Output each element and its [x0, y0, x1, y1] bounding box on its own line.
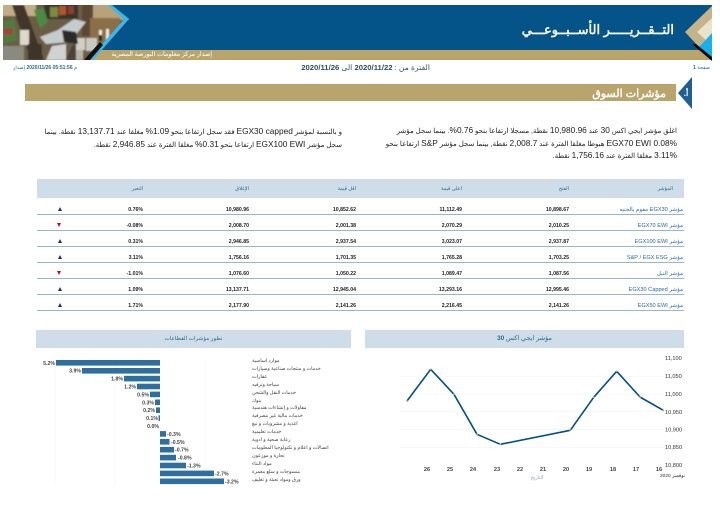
- bar chart: sectors: 1.8%: [111, 377, 123, 383]
- section heading bar: [25, 77, 692, 109]
- indices table: 1,756.16: [229, 255, 249, 261]
- indices table: 1.71%: [128, 303, 143, 309]
- indices table: 2,946.85: [229, 239, 249, 245]
- bar chart: sectors: 3.9%: [69, 369, 81, 375]
- indices table: -1.01%: [127, 271, 143, 277]
- chevron: cyan and black accents: [84, 5, 129, 60]
- sector labels: خدمات مالية غير مصرفية: [252, 414, 303, 419]
- bar chart: sectors: [43, 360, 239, 485]
- bar chart: sectors: 0.0%: [147, 424, 159, 430]
- issue date: م 05:51:56 2020/11/26 إصدار: [13, 65, 77, 71]
- indices table: 0.31%: [128, 239, 143, 245]
- sector labels: سياحة وترفيه: [252, 383, 279, 388]
- sector labels: خدمات النقل والشحن: [252, 391, 296, 396]
- indices table: 0.76%: [128, 207, 143, 213]
- paragraph left: سجل مؤشر EGX100 EWI ارتفاعا بنحو 0.31% مغلقا الفترة عند 2,946.85 نقطة.: [94, 139, 342, 149]
- bar chart: sectors: -0.7%: [175, 448, 189, 454]
- bar chart: sectors: -2.7%: [215, 471, 229, 477]
- y axis labels: [665, 356, 682, 469]
- indices table: 12,995.46: [546, 287, 569, 293]
- x axis labels: 18: [610, 467, 616, 473]
- indices table: 2,141.26: [549, 303, 569, 309]
- indices table: 1.09%: [128, 287, 143, 293]
- indices table: 2,010.25: [549, 223, 569, 229]
- indices table: 10,898.67: [546, 207, 569, 213]
- banner background: [92, 5, 712, 60]
- indices table: -0.08%: [127, 223, 143, 229]
- paragraph left: و بالنسبة لمؤشر EGX30 capped فقد سجل ارتفاعا بنحو 1.09% مغلقا عند 13,137.71 نقطة. بينما: [45, 126, 342, 136]
- indices table: 11,112.49: [439, 207, 462, 213]
- x axis labels: 20: [563, 467, 569, 473]
- panel: EGX30 chart header: مؤشر ايجي اكس 30: [497, 335, 552, 342]
- bar chart: sectors: -0.3%: [167, 432, 181, 438]
- sector labels: رعاية صحية و ادوية: [252, 438, 290, 443]
- y axis labels: 10,850: [665, 445, 682, 451]
- paragraph left: [45, 126, 342, 149]
- paragraph right: 3.11% مغلقا الفترة عند 1,756.16 نقطة.: [553, 150, 677, 160]
- indices table: 2,937.87: [549, 239, 569, 245]
- sector labels: بنوك: [252, 399, 261, 404]
- indices table: اقل قيمة: [338, 186, 356, 192]
- indices table: 1,050.22: [336, 271, 356, 277]
- sector labels: ورق ومواد تعبئة و تغليف: [252, 478, 301, 483]
- x axis labels: 23: [494, 467, 500, 473]
- indices table: 2,008.70: [229, 223, 249, 229]
- bar chart: sectors: 0.5%: [137, 392, 149, 398]
- indices table: مؤشر EGX30 مقوم بالجنيه: [619, 207, 683, 213]
- bar chart: sectors: -0.8%: [178, 456, 192, 462]
- x axis labels: 25: [447, 467, 453, 473]
- indices table: 3,023.07: [442, 239, 462, 245]
- sector labels: مقاولات و إنشاءات هندسية: [252, 406, 306, 411]
- indices table: المؤشر: [658, 186, 673, 192]
- y axis labels: 10,900: [665, 428, 682, 434]
- indices table: 2,001.38: [336, 223, 356, 229]
- y axis labels: 11,050: [665, 374, 682, 380]
- x axis labels: [424, 467, 662, 473]
- bar chart: sectors: 0.1%: [146, 416, 158, 422]
- bar chart: sectors: 0.2%: [143, 408, 155, 414]
- axis caption: 2020 نوفمبر: [660, 473, 685, 479]
- indices table: 2,177.90: [229, 303, 249, 309]
- indices table: مؤشر EGX30 Capped: [629, 287, 683, 293]
- bar chart: sectors: 1.2%: [124, 384, 136, 390]
- sector labels: اغذية و مشروبات و تبغ: [252, 422, 298, 427]
- column titles: [132, 186, 673, 192]
- indices table: مؤشر النيل: [657, 271, 683, 277]
- paragraph right: EGX70 EWI 0.08% هبوطا مغلقا الفترة عند 2,008.7 نقطة, بينما سجل مؤشر S&P ارتفاعا بنحو: [386, 138, 677, 148]
- indices table: الفتح: [559, 186, 569, 192]
- sector labels: عقارات: [252, 375, 267, 380]
- indices table: 13,137.71: [226, 287, 249, 293]
- section heading text: مؤشرات السوق: [592, 88, 666, 100]
- photo: stock exchange floor: [3, 5, 128, 60]
- indices table: مؤشر EGX70 EWI: [638, 223, 683, 229]
- banner title: التــقــريـــــر الأســبــوعـــي: [522, 22, 674, 37]
- indices table: مؤشر S&P / EGX ESG: [627, 255, 683, 261]
- indices table: مؤشر EGX100 EWI: [635, 239, 683, 245]
- x axis labels: 19: [586, 467, 592, 473]
- sector labels: خدمات و منتجات صناعية وسيارات: [252, 367, 321, 372]
- sector labels: خدمات تعليمية: [252, 430, 281, 435]
- indices table: مؤشر EGX50 EWI: [638, 303, 683, 309]
- panel: sector chart header: تطور مؤشرات القطاعات: [164, 336, 222, 342]
- indices table: 2,070.29: [442, 223, 462, 229]
- y axis labels: 11,100: [665, 356, 682, 362]
- indices table: 1,765.28: [442, 255, 462, 261]
- indices table: 12,945.04: [333, 287, 356, 293]
- indices table: 1,701.35: [336, 255, 356, 261]
- decorative diamond right: [685, 6, 712, 61]
- x axis labels: 24: [470, 467, 477, 473]
- sector labels: [252, 358, 329, 483]
- bar chart: sectors: 5.2%: [43, 361, 55, 367]
- report period: الفترة من : 2020/11/22 الى 2020/11/26: [301, 63, 430, 72]
- x axis labels: 26: [424, 467, 430, 473]
- indices table: اعلى قيمة: [441, 186, 462, 192]
- indices table: 1,089.47: [442, 271, 462, 277]
- line chart: EGX30: [400, 356, 685, 481]
- y axis labels: 11,000: [665, 392, 682, 398]
- indices table: 2,937.54: [336, 239, 356, 245]
- panel: sector chart header: [36, 330, 351, 348]
- table rows: [37, 206, 684, 311]
- axis title: التاريخ: [531, 475, 543, 481]
- indices table: الإغلاق: [235, 186, 249, 192]
- section number: .أ: [684, 89, 688, 98]
- indices table: 1,087.56: [549, 271, 569, 277]
- table header: [37, 179, 684, 198]
- x axis labels: 16: [656, 467, 662, 473]
- indices table: 1,703.25: [549, 255, 569, 261]
- x axis labels: 21: [540, 467, 546, 473]
- indices table: 2,141.26: [336, 303, 356, 309]
- bar chart: sectors: -0.5%: [171, 440, 185, 446]
- indices table: 3.11%: [129, 255, 143, 261]
- panel: EGX30 chart header: [365, 330, 684, 348]
- indices table: 13,293.16: [439, 287, 462, 293]
- y axis labels: 10,950: [665, 410, 682, 416]
- sector labels: تجارة و موزعون: [252, 454, 285, 459]
- page number: صفحة 1: [693, 65, 710, 71]
- paragraph right: اغلق مؤشر ايجي اكس 30 عند 10,980.96 نقطة, مسجلا ارتفاعا بنحو 0.76%. بينما سجل مؤشر: [397, 125, 677, 135]
- sector labels: مواد البناء: [252, 462, 272, 467]
- sector labels: موارد اساسية: [252, 359, 280, 364]
- indices table: التغير: [132, 186, 143, 192]
- x axis labels: 22: [517, 467, 523, 473]
- indices table: 10,852.62: [333, 207, 356, 213]
- bar chart: sectors: 0.3%: [142, 400, 154, 406]
- bar chart: sectors: -1.3%: [187, 464, 201, 470]
- y axis labels: 10,800: [665, 463, 682, 469]
- sector labels: منسوجات و سلع معمرة: [252, 470, 300, 475]
- sector labels: اتصالات و اعلام و تكنولوجيا المعلومات: [252, 446, 329, 451]
- header banner: [3, 5, 712, 61]
- indices table: [37, 179, 684, 311]
- indices table: 2,216.45: [442, 303, 462, 309]
- x axis labels: 17: [633, 467, 639, 473]
- paragraph right: [385, 125, 677, 160]
- banner subtitle: إصدار مركز معلومات البورصة المصرية: [112, 51, 212, 58]
- indices table: 10,980.96: [226, 207, 249, 213]
- bar chart: sectors: -3.2%: [225, 479, 239, 485]
- indices table: 1,076.60: [229, 271, 249, 277]
